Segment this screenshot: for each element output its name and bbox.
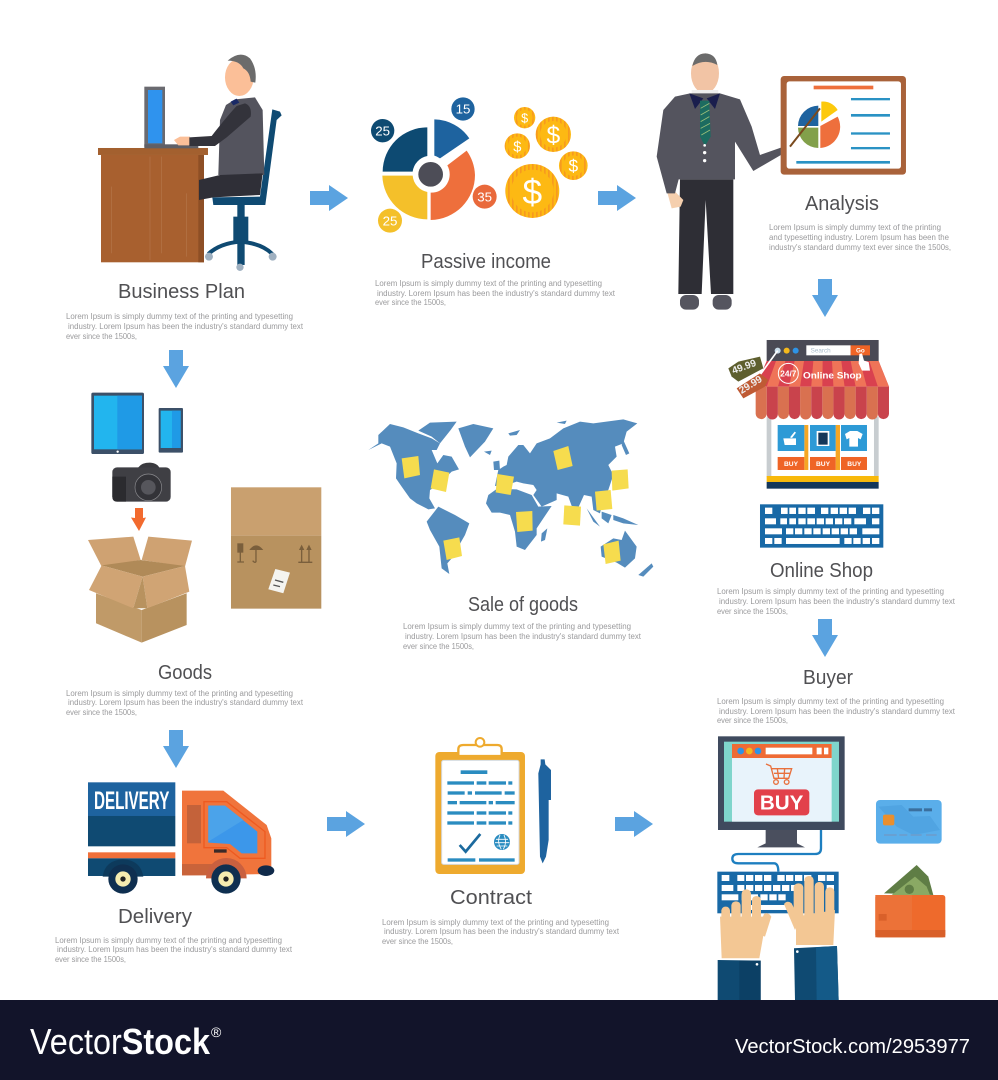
text: business plan description: industry. Lorem Ipsum has been the industry's standard dummy text <box>68 322 304 331</box>
icon: online shop storefront: 29.99 <box>737 374 765 397</box>
arrow: passive income to analysis <box>598 185 636 211</box>
panel: online shop <box>717 340 956 616</box>
text: delivery description <box>55 936 293 964</box>
text: delivery description: Lorem Ipsum is simply dummy text of the printing and typesetting <box>55 936 282 945</box>
panel: delivery <box>55 782 293 964</box>
icon: computer with buy button and typing hands <box>717 736 845 1000</box>
panel: business plan <box>66 55 304 341</box>
icon: online shop storefront: 49.99 <box>731 358 758 377</box>
heading: Online Shop: Online Shop <box>770 559 873 582</box>
text: sale of goods description: Lorem Ipsum is simply dummy text of the printing and typesetting <box>403 622 631 631</box>
text: buyer description: industry. Lorem Ipsum has been the industry's standard dummy text <box>719 707 956 716</box>
text: contract description: ever since the 1500s, <box>382 937 453 946</box>
text: analysis description: industry's standard dummy text ever since the 1500s, <box>769 243 951 252</box>
text: contract description: Lorem Ipsum is simply dummy text of the printing and typesetting <box>382 918 609 927</box>
text: passive income description: industry. Lorem Ipsum has been the industry's standard dummy text <box>377 289 616 298</box>
panel: goods <box>66 393 321 717</box>
text: online shop description: industry. Lorem Ipsum has been the industry's standard dummy text <box>719 597 956 606</box>
icon: wallet with money <box>875 865 945 937</box>
icon: online shop storefront: BUY <box>784 461 799 468</box>
text: buyer description <box>717 697 956 725</box>
icon: world map with sticky notes <box>368 419 653 577</box>
icon: computer with buy button and typing hands: BUY <box>760 792 804 815</box>
icon: delivery truck: DELIVERY <box>94 787 169 815</box>
panel: buyer <box>717 666 956 1000</box>
text: passive income description: ever since the 1500s, <box>375 298 446 307</box>
heading: Business Plan: Business Plan <box>118 280 245 303</box>
text: online shop description <box>717 587 956 616</box>
arrow: delivery to contract <box>327 811 365 837</box>
text: business plan description <box>66 312 304 341</box>
heading: Sale of goods: Sale of goods <box>468 593 578 616</box>
icon: man presenting at board <box>657 53 906 310</box>
heading: Analysis: Analysis <box>805 192 879 215</box>
text: goods description <box>66 689 304 717</box>
panel: contract <box>382 738 620 946</box>
heading: Passive income: Passive income <box>421 250 551 273</box>
text: contract description <box>382 918 620 946</box>
text: delivery description: ever since the 1500s, <box>55 955 126 964</box>
icon: online shop storefront: Online Shop <box>803 371 862 381</box>
text: sale of goods description: industry. Lorem Ipsum has been the industry's standard dummy text <box>405 632 642 641</box>
panel: analysis <box>657 53 951 310</box>
icon: pie chart and coins <box>371 97 588 233</box>
icon: pie chart and coins: $ <box>546 122 560 149</box>
icon: delivery truck <box>88 782 274 894</box>
icon: closed cardboard box <box>231 487 321 609</box>
heading: Buyer: Buyer <box>803 666 853 689</box>
icon: credit card <box>876 800 942 844</box>
text: online shop description: Lorem Ipsum is simply dummy text of the printing and typesetting <box>717 587 944 596</box>
icon: pie chart and coins: $ <box>521 111 528 125</box>
heading: Delivery: Delivery <box>118 905 193 928</box>
arrow: business plan to passive income <box>310 185 348 211</box>
icon: orange down arrow <box>131 508 146 531</box>
icon: clipboard contract and pen <box>435 738 551 874</box>
registered mark: ® <box>211 1024 222 1040</box>
image id link text: VectorStock.com/2953977 <box>735 1036 970 1058</box>
icon: online shop storefront: 24/7 <box>780 368 797 378</box>
text: sale of goods description <box>403 622 642 651</box>
heading: Goods: Goods <box>158 661 212 684</box>
arrow: analysis to online shop <box>812 279 838 317</box>
panel: passive income <box>371 97 616 307</box>
text: analysis description <box>769 223 951 252</box>
icon: online shop storefront: Search <box>811 348 831 355</box>
icon: pie chart and coins: 25 <box>375 123 390 138</box>
arrow: contract to buyer <box>615 811 653 837</box>
icon: pie chart and coins: 25 <box>383 213 397 228</box>
text: passive income description <box>375 279 616 307</box>
heading: Contract: Contract <box>450 886 532 909</box>
icon: online shop storefront: BUY <box>847 461 862 468</box>
icon: online shop storefront: Go <box>856 348 865 355</box>
icon: open cardboard box <box>88 537 192 643</box>
icon: pie chart and coins: $ <box>522 173 542 212</box>
text: analysis description: and typesetting industry. Lorem Ipsum has been the <box>769 233 950 242</box>
icon: pie chart and coins: $ <box>513 139 521 155</box>
text: business plan description: ever since the 1500s, <box>66 332 137 341</box>
logo: VectorStock: VectorStock <box>30 1021 211 1062</box>
text: analysis description: Lorem Ipsum is simply dummy text of the printing <box>769 223 941 232</box>
icon: shop keyboard <box>760 504 883 548</box>
footer bar <box>0 1000 998 1080</box>
arrow: online shop to buyer <box>812 619 838 657</box>
text: online shop description: ever since the 1500s, <box>717 607 788 616</box>
text: sale of goods description: ever since the 1500s, <box>403 642 474 651</box>
panel: sale of goods <box>368 419 653 651</box>
icon: online shop storefront <box>728 340 889 489</box>
arrow: business plan to goods <box>163 350 189 388</box>
text: goods description: Lorem Ipsum is simply dummy text of the printing and typesetting <box>66 689 293 698</box>
icon: pie chart and coins: 35 <box>477 189 492 204</box>
icon: pie chart and coins: $ <box>568 156 578 176</box>
text: passive income description: Lorem Ipsum is simply dummy text of the printing and typesetting <box>375 279 602 288</box>
text: goods description: ever since the 1500s, <box>66 708 137 717</box>
icon: devices and camera <box>91 393 183 502</box>
text: buyer description: Lorem Ipsum is simply dummy text of the printing and typesetting <box>717 697 944 706</box>
icon: pie chart and coins: 15 <box>456 102 470 117</box>
arrow: goods to delivery <box>163 730 189 768</box>
text: business plan description: Lorem Ipsum is simply dummy text of the printing and typesetting <box>66 312 293 321</box>
icon: online shop storefront: BUY <box>816 461 831 468</box>
icon: man working at desk <box>98 55 282 271</box>
text: delivery description: industry. Lorem Ipsum has been the industry's standard dummy text <box>57 945 293 954</box>
text: buyer description: ever since the 1500s, <box>717 716 788 725</box>
text: goods description: industry. Lorem Ipsum has been the industry's standard dummy text <box>68 698 304 707</box>
text: contract description: industry. Lorem Ipsum has been the industry's standard dummy text <box>384 927 620 936</box>
